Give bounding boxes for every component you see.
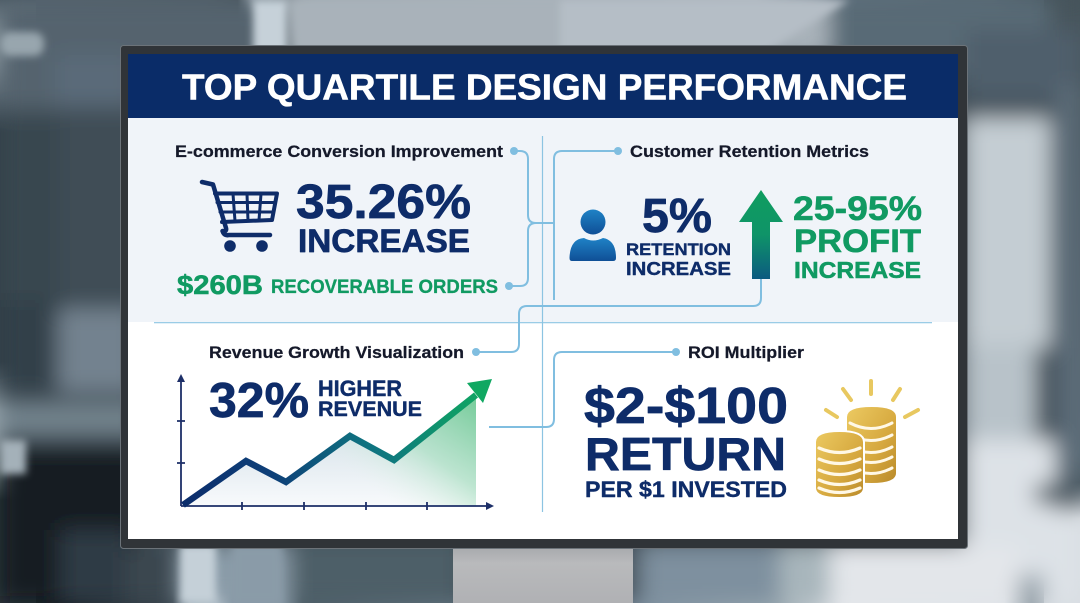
panel: ROI multiplier xyxy=(584,343,918,502)
title: TOP QUARTILE DESIGN PERFORMANCE xyxy=(182,66,907,108)
panel heading: ROI Multiplier xyxy=(688,343,804,362)
header banner xyxy=(128,54,958,118)
icon: gold coin stacks xyxy=(815,381,918,498)
front coin stack xyxy=(815,431,864,498)
coin rays xyxy=(826,381,918,417)
monitor stand xyxy=(453,546,633,603)
icon: person xyxy=(570,210,616,261)
panel: customer retention xyxy=(570,142,922,283)
stat: 25-95% profit increase: 25-95% xyxy=(793,190,922,228)
stat: $2-$100 return: PER $1 INVESTED xyxy=(585,477,787,502)
panel: revenue growth xyxy=(177,343,494,510)
monitor frame xyxy=(120,46,968,548)
panel heading: Revenue Growth Visualization xyxy=(209,343,464,362)
stat label: retention increase: RETENTION xyxy=(626,240,731,259)
screen xyxy=(128,54,958,539)
panel heading: Customer Retention Metrics xyxy=(630,142,869,161)
trend arrowhead xyxy=(467,379,492,403)
stat label: higher revenue: REVENUE xyxy=(318,398,422,421)
icon: shopping cart xyxy=(202,182,277,252)
panel: e-commerce conversion xyxy=(175,142,503,300)
trend line xyxy=(183,395,476,505)
stat label: retention increase xyxy=(626,240,731,279)
stat label: retention increase: INCREASE xyxy=(626,258,731,279)
stat: 32%: 32% xyxy=(209,374,309,428)
line chart xyxy=(177,374,494,510)
connector lines xyxy=(472,147,761,427)
stat: $260B: $260B xyxy=(177,270,263,300)
stat: $2-$100 return: RETURN xyxy=(585,428,786,480)
icon: green up arrow xyxy=(739,190,783,279)
panel heading: E-commerce Conversion Improvement xyxy=(175,142,503,161)
stat: 5%: 5% xyxy=(642,190,712,243)
stat: 25-95% profit increase: INCREASE xyxy=(794,257,921,283)
stat label: higher revenue xyxy=(318,376,422,421)
stat: $2-$100 return: $2-$100 xyxy=(584,377,788,434)
back coin stack xyxy=(847,407,896,483)
stat: 25-95% profit increase: PROFIT xyxy=(794,223,921,259)
stat label: higher revenue: HIGHER xyxy=(318,376,402,401)
stat: 35.26%: 35.26% xyxy=(296,176,471,229)
chart area fill xyxy=(181,396,476,506)
stat: 25-95% profit increase xyxy=(793,190,922,283)
stat label: increase: INCREASE xyxy=(298,223,470,259)
chart axes xyxy=(177,374,494,510)
stat: $2-$100 return xyxy=(584,377,788,502)
stat label: recoverable orders: RECOVERABLE ORDERS xyxy=(271,277,498,298)
divider lines xyxy=(154,136,932,512)
